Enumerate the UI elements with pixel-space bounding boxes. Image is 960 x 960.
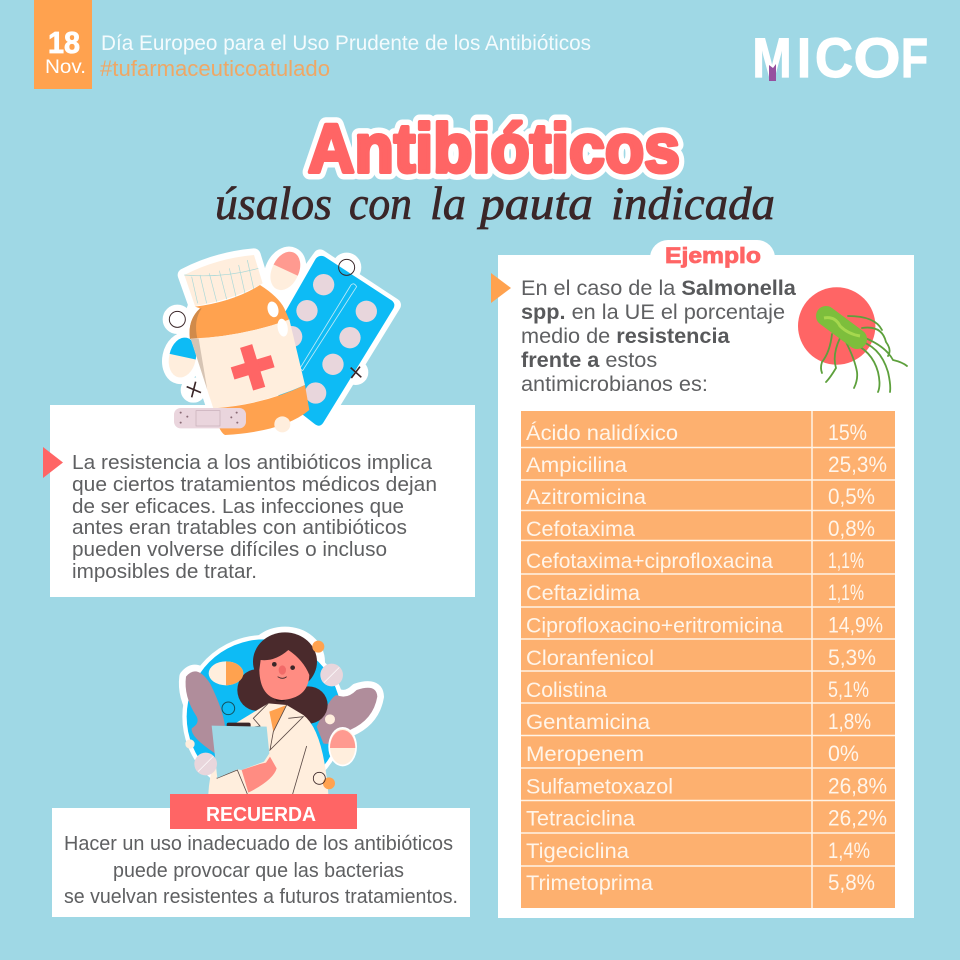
percentages: 1,8% xyxy=(828,709,871,734)
header text: Día Europeo para el Uso Prudente de los Antibióticos xyxy=(101,32,591,55)
drug names: Ciprofloxacino+eritromicina xyxy=(526,614,783,638)
percentages: 26,2% xyxy=(828,806,887,830)
text block: reminder: puede provocar que las bacterias xyxy=(113,860,404,882)
heading: recuerda xyxy=(170,794,357,829)
hair back xyxy=(237,632,328,724)
drug names: Trimetoprima xyxy=(526,871,653,895)
text block: resistance explanation: pueden volverse difíciles o incluso xyxy=(72,538,387,561)
logo: MICOF: O xyxy=(854,26,900,89)
percentages: 1,1% xyxy=(828,580,864,605)
text block: reminder: Hacer un uso inadecuado de los antibióticos xyxy=(64,833,453,855)
text block: reminder xyxy=(64,833,458,908)
icon: medicine bottle, pills and blister pack xyxy=(165,247,394,435)
text block: resistance explanation xyxy=(72,451,437,583)
percentages: 26,8% xyxy=(828,774,887,798)
text block: salmonella intro: medio de resistencia xyxy=(521,323,731,348)
bandage xyxy=(174,408,246,428)
logo: MICOF: F xyxy=(901,26,928,89)
panel: recuerda xyxy=(52,794,470,917)
logo: MICOF xyxy=(752,26,928,89)
title: Antibióticos xyxy=(308,110,680,187)
drug names: Ceftazidima xyxy=(526,581,640,605)
bottle xyxy=(184,255,309,435)
logo: MICOF: M xyxy=(752,26,792,89)
pills xyxy=(194,661,355,775)
heading tab: ejemplo: Ejemplo xyxy=(665,243,761,268)
pill: pink xyxy=(265,247,306,295)
percentages: 14,9% xyxy=(828,612,883,638)
text block: reminder: se vuelvan resistentes a futuros tratamientos. xyxy=(64,886,458,908)
panel: ejemplo xyxy=(491,240,914,918)
date badge xyxy=(34,0,92,89)
heading: recuerda: RECUERDA xyxy=(206,804,316,826)
text block: salmonella intro xyxy=(521,275,797,396)
subtitle: la xyxy=(430,178,466,230)
percentages: 0,5% xyxy=(828,484,875,509)
drug names: Meropenem xyxy=(526,742,644,766)
text block: resistance explanation: imposibles de tratar. xyxy=(72,560,257,583)
header text: #tufarmaceuticoatulado xyxy=(100,56,330,81)
percentages: 0% xyxy=(828,741,859,766)
date badge: Nov. xyxy=(45,57,86,78)
drug names: Tetraciclina xyxy=(526,806,635,830)
percentages: 25,3% xyxy=(828,452,887,477)
clipboard xyxy=(212,726,269,778)
drug names: Colistina xyxy=(526,678,607,702)
icon: pharmacist illustration xyxy=(180,632,377,814)
drug names: Azitromicina xyxy=(526,485,646,509)
drug names: Ácido nalidíxico xyxy=(526,420,678,445)
text block: salmonella intro: spp. en la UE el porcentaje xyxy=(521,299,785,324)
subtitle: pauta xyxy=(477,178,593,230)
face xyxy=(259,650,309,701)
decorative circles and crosses xyxy=(169,259,361,397)
percentages: 5,3% xyxy=(828,645,876,670)
percentages: 1,4% xyxy=(828,838,870,863)
text block: resistance explanation: La resistencia a los antibióticos implica xyxy=(72,451,433,474)
header text xyxy=(100,32,591,81)
text block: salmonella intro: antimicrobianos es: xyxy=(521,371,708,396)
coat xyxy=(208,703,328,794)
arrow: orange marker xyxy=(491,273,511,303)
logo: MICOF: I xyxy=(797,26,811,89)
percentages: 0,8% xyxy=(828,516,875,541)
drug names: Cefotaxima+ciprofloxacina xyxy=(526,549,773,573)
drug names: Gentamicina xyxy=(526,710,650,734)
pill: blue xyxy=(165,335,200,380)
small dots and rings xyxy=(185,641,335,789)
subtitle: con xyxy=(349,178,412,230)
purple leaves xyxy=(186,671,377,753)
drug names: Ampicilina xyxy=(526,453,627,477)
percentages: 5,8% xyxy=(828,870,875,895)
text block: resistance explanation: que ciertos tratamientos médicos dejan xyxy=(72,473,437,496)
subtitle xyxy=(215,178,775,230)
drug names: Sulfametoxazol xyxy=(526,774,673,798)
subtitle: indicada xyxy=(611,178,775,230)
date badge: 18 xyxy=(48,25,80,60)
title: Antibióticos xyxy=(308,110,680,187)
panel: resistance text xyxy=(43,405,475,597)
arrow: red marker xyxy=(43,447,63,478)
white outline xyxy=(186,633,377,792)
text block: salmonella intro: frente a estos xyxy=(521,347,657,372)
text block: resistance explanation: antes eran tratables con antibióticos xyxy=(72,516,407,539)
heading tab: ejemplo xyxy=(650,240,775,280)
blister pack xyxy=(250,256,394,426)
icon: bacterium xyxy=(798,287,907,392)
logo: MICOF: C xyxy=(815,26,853,89)
table: resistance percentages xyxy=(521,411,895,908)
percentages: 1,1% xyxy=(828,548,864,573)
percentages xyxy=(828,420,887,895)
hand xyxy=(242,757,277,793)
drug names: Cloranfenicol xyxy=(526,646,654,670)
percentages: 5,1% xyxy=(828,677,869,702)
text block: salmonella intro: En el caso de la Salmonella xyxy=(521,275,797,300)
text block: resistance explanation: de ser eficaces. Las infecciones que xyxy=(72,495,404,518)
subtitle: úsalos xyxy=(215,178,332,230)
drug names xyxy=(526,420,783,895)
drug names: Tigeciclina xyxy=(526,839,629,863)
percentages: 15% xyxy=(828,420,867,445)
drug names: Cefotaxima xyxy=(526,517,635,541)
